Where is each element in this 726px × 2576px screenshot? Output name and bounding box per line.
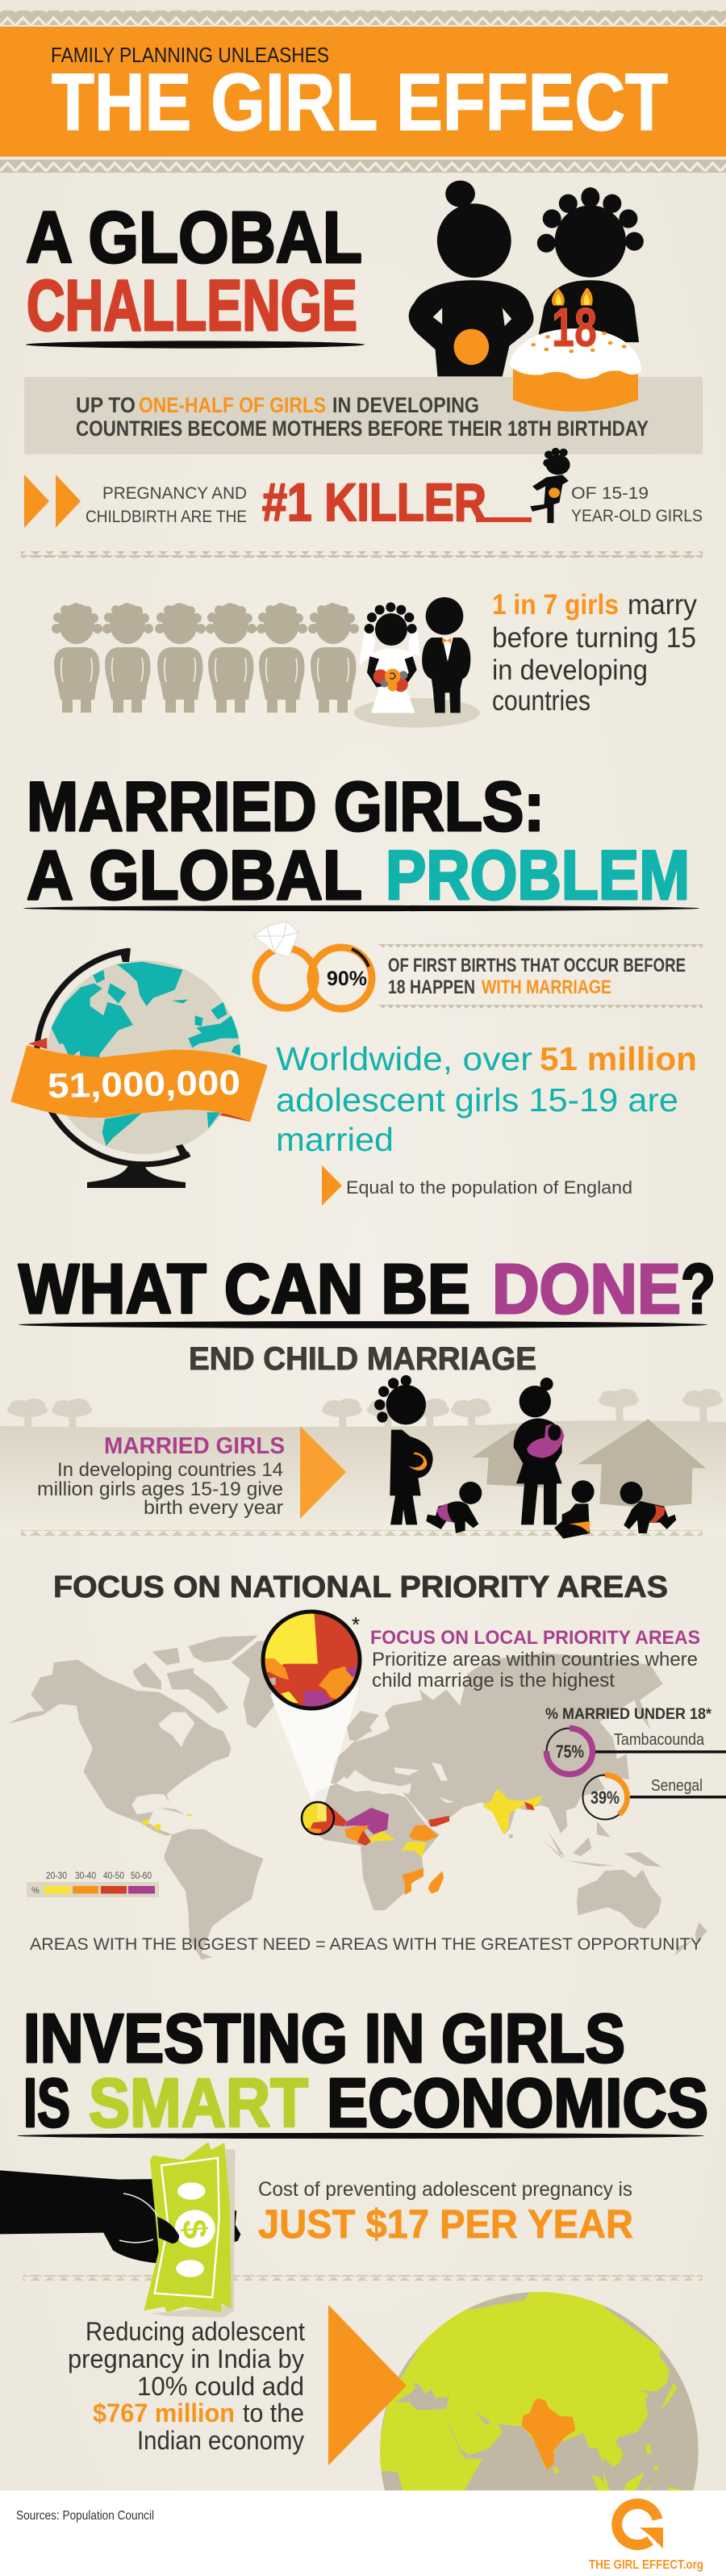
chart: percent married under 18: Senegal (651, 1777, 703, 1795)
landscape: trees and ground (0, 1389, 726, 1536)
icon: birthday cake: 18 (552, 297, 597, 358)
header zigzag bottom (0, 160, 726, 173)
legend (27, 1870, 159, 1897)
icon: falling girl (530, 448, 570, 523)
text: worldwide 51 million: adolescent girls 15-19 are (276, 1081, 678, 1119)
text: one in seven girls: countries (492, 685, 590, 717)
icon: hand holding money (0, 2142, 240, 2318)
text: married girls (37, 1433, 285, 1519)
heading: married girls (23, 768, 699, 914)
heading: married girls: PROBLEM (386, 837, 690, 914)
text: worldwide 51 million (276, 1040, 697, 1158)
header band (0, 27, 726, 157)
icon: wedding rings: 90% (327, 968, 367, 990)
callout: banner 51,000,000 (10, 1038, 268, 1122)
heading: married girls: A GLOBAL (27, 837, 362, 914)
chart: percent married under 18: 75% (556, 1742, 584, 1762)
text: pregnancy and childbirth: CHILDBIRTH ARE THE (86, 508, 247, 526)
text: married girls: MARRIED GIRLS (104, 1433, 285, 1459)
text: one in seven girls: before turning 15 (492, 622, 696, 654)
header kicker: FAMILY PLANNING UNLEASHES (51, 43, 329, 67)
text: reducing adolescent pregnancy: Reducing adolescent (86, 2317, 305, 2346)
arrows: double chevron (24, 475, 81, 528)
icon: birthday cake (509, 287, 641, 412)
text: ninety percent of first births: WITH MARRIAGE (482, 976, 611, 998)
text: reducing adolescent pregnancy (68, 2317, 305, 2455)
heading: what can be done: WHAT CAN BE (19, 1250, 470, 1328)
grey band: one-half of girls: UP TO (76, 393, 136, 417)
text: reducing adolescent pregnancy: to the (243, 2398, 304, 2428)
text: worldwide 51 million: 51 million (540, 1040, 697, 1077)
legend: 20-30 (46, 1870, 67, 1881)
logo: the girl effect: THE GIRL EFFECT.org (589, 2558, 703, 2572)
figures: girl, mother and babies (374, 1375, 676, 1539)
text: married girls: birth every year (144, 1497, 283, 1519)
text: cost of preventing pregnancy (258, 2178, 633, 2247)
text: reducing adolescent pregnancy: 10% could add (137, 2372, 304, 2401)
text: cost of preventing pregnancy: Cost of preventing adolescent pregnancy is (258, 2178, 632, 2201)
text: pregnancy and childbirth (86, 484, 247, 526)
logo: the girl effect (589, 2503, 703, 2572)
sources: Sources: Population Council (16, 2509, 154, 2523)
inset: zoomed region (258, 1610, 363, 1711)
arrow (322, 1165, 342, 1206)
text: of 15-19 year-old girls: OF 15-19 (571, 484, 649, 503)
icon: hand holding money: $ (175, 2218, 215, 2240)
icon: wedding rings (254, 922, 372, 1009)
text: local priority areas: FOCUS ON LOCAL PRIORITY AREAS (370, 1627, 700, 1649)
heading: a global challenge (26, 198, 365, 349)
legend: 30-40 (75, 1870, 96, 1881)
chart: six tan girls (52, 603, 359, 713)
beam from map to inset (270, 1687, 359, 1802)
stat: number one killer: #1 KILLER (262, 472, 486, 532)
legend: 40-50 (103, 1870, 124, 1881)
text: worldwide 51 million: married (276, 1121, 394, 1158)
text: pregnancy and childbirth: PREGNANCY AND (102, 484, 247, 503)
heading: a global challenge: CHALLENGE (27, 265, 357, 345)
inset marker on Senegal (301, 1801, 336, 1836)
text: one in seven girls: marry (628, 589, 697, 621)
heading: investing in girls (17, 2001, 708, 2142)
text: one in seven girls: 1 in 7 girls (492, 589, 619, 621)
heading: investing in girls: IS (23, 2065, 70, 2142)
heading: a global challenge: A GLOBAL (26, 198, 362, 278)
text: married girls: In developing countries 14 (57, 1459, 283, 1481)
chart: percent married under 18 (545, 1706, 726, 1819)
text: reducing adolescent pregnancy: pregnancy in India by (68, 2344, 304, 2373)
chart: percent married under 18: Tambacounda (614, 1731, 705, 1749)
grey band: one-half of girls: ONE-HALF OF GIRLS (139, 393, 326, 417)
text: reducing adolescent pregnancy: Indian economy (137, 2426, 304, 2455)
chart: percent married under 18: % MARRIED UNDER 18* (545, 1706, 712, 1723)
header zigzag top (0, 10, 726, 25)
text: one in seven girls: in developing (492, 654, 648, 686)
text: areas with the biggest need: AREAS WITH THE BIGGEST NEED = AREAS WITH THE GREATEST OPPORTUNITY (30, 1935, 702, 1954)
heading: married girls: MARRIED GIRLS: (27, 768, 544, 846)
heading: what can be done: DONE (492, 1250, 681, 1328)
legend: % (31, 1886, 40, 1896)
text: married girls: million girls ages 15-19 give (37, 1478, 283, 1500)
chart: world map (8, 1636, 707, 2219)
text: cost of preventing pregnancy: JUST $17 PER YEAR (258, 2202, 633, 2247)
chart: percent married under 18: 39% (590, 1788, 620, 1808)
text: equal to population of england: Equal to the population of England (346, 1177, 632, 1198)
grey band: one-half of girls: IN DEVELOPING (332, 393, 479, 417)
subheading: national priority areas: FOCUS ON NATIONAL PRIORITY AREAS (53, 1570, 668, 1604)
footer (0, 2490, 726, 2576)
icon: globe (36, 948, 240, 1188)
icon: child bride and groom (353, 597, 480, 728)
callout: banner 51,000,000: 51,000,000 (48, 1064, 240, 1106)
grey band: one-half of girls (24, 377, 703, 454)
icon: globe showing India (380, 2292, 699, 2490)
heading: what can be done: ? (681, 1250, 716, 1328)
arrow (328, 2305, 407, 2465)
text: local priority areas: Prioritize areas within countries where (372, 1649, 698, 1671)
text: ninety percent of first births (388, 955, 686, 998)
subheading: end child marriage: END CHILD MARRIAGE (189, 1341, 536, 1377)
text: local priority areas: child marriage is the highest (372, 1670, 615, 1692)
text: of 15-19 year-old girls (571, 484, 703, 525)
text: one in seven girls (492, 589, 697, 717)
text: reducing adolescent pregnancy: $767 million (93, 2398, 235, 2428)
text: worldwide 51 million: Worldwide, over (276, 1040, 532, 1077)
heading: investing in girls: INVESTING IN GIRLS (23, 2001, 625, 2077)
text: ninety percent of first births: 18 HAPPEN (388, 976, 475, 998)
inset: zoomed region: * (352, 1612, 360, 1637)
arrow (300, 1426, 346, 1519)
illustration: mother, girl (409, 181, 644, 376)
heading: investing in girls: SMART (89, 2065, 308, 2142)
text: local priority areas (370, 1627, 700, 1692)
text: of 15-19 year-old girls: YEAR-OLD GIRLS (571, 507, 703, 525)
icon: huts (472, 1419, 706, 1508)
legend: 50-60 (131, 1870, 152, 1881)
